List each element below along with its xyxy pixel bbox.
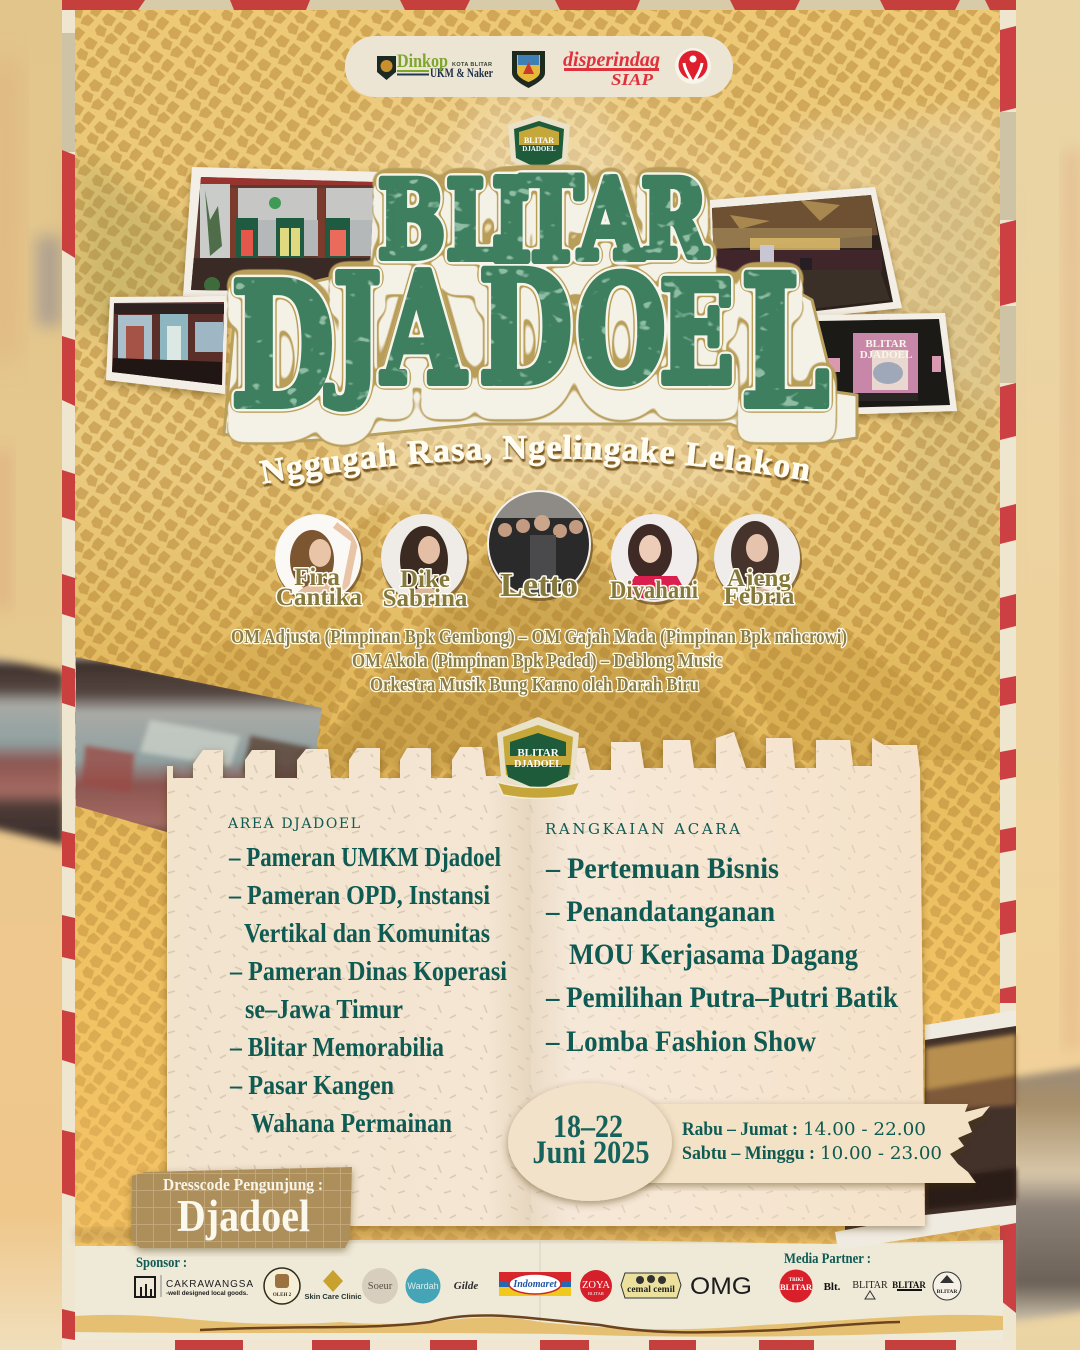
logo: Gilde: Gilde: [454, 1280, 478, 1292]
items: se–Jawa Timur: [245, 994, 403, 1024]
logo: Cakrawangsa: [135, 1275, 253, 1297]
logo: Cakrawangsa: -well designed local goods.: [166, 1290, 248, 1297]
logo: Soeur: [362, 1268, 398, 1304]
logo pill: [345, 36, 733, 97]
badge: Blitar Djadoel panel: BLITAR: [517, 747, 560, 759]
items: – Pameran OPD, Instansi: [228, 880, 490, 910]
heading: RANGKAIAN ACARA: [545, 820, 740, 838]
photo: blurred film left: [76, 657, 322, 832]
logo: Zoya: ZOYA: [582, 1280, 610, 1291]
title backing: white block behind letters: [224, 248, 857, 443]
performer: Ajeng Febria: [714, 514, 802, 610]
supporting acts: Orkestra Musik Bung Karno oleh Darah Biru: [370, 675, 699, 696]
logo: Tribun Blitar: [780, 1270, 813, 1302]
name: Febria: [724, 583, 795, 610]
logo: Dinkop: Dinkop: [397, 51, 448, 72]
date and time ribbon: 14.00 - 22.00: [803, 1119, 926, 1140]
media partners: [780, 1251, 961, 1302]
logo: Blt: Blt.: [824, 1281, 841, 1293]
title line: DJADOEL: D: [479, 238, 572, 419]
title line: BLITAR: T: [519, 153, 583, 287]
logo: Cakrawangsa: CAKRAWANGSA: [166, 1279, 253, 1290]
list: Area Djadoel: [227, 816, 507, 1138]
label: Media Partner :: [784, 1251, 871, 1267]
logo: Skin Care Clinic: [304, 1270, 362, 1301]
supporting acts: OM Adjusta (Pimpinan Bpk Gembong) – OM Gajah Mada (Pimpinan Bpk nahcrowi): [231, 627, 847, 648]
items: Wahana Permainan: [251, 1108, 452, 1138]
logo: Indomaret: [499, 1272, 571, 1296]
heading: AREA DJADOEL: [227, 816, 360, 832]
items: MOU Kerjasama Dagang: [569, 938, 858, 971]
logo: Kota Blitar crest: [512, 51, 545, 88]
badge: Blitar Djadoel top: BLITAR: [524, 136, 554, 145]
name: Sabrina: [383, 585, 468, 612]
ribbon: [590, 1104, 990, 1183]
logo: circle emblem: BLITAR: [937, 1289, 958, 1295]
logo: Indomaret: Indomaret: [512, 1279, 558, 1290]
dresscode tag: [131, 1167, 352, 1248]
performer: Letto: [485, 490, 595, 604]
photo: night market: [705, 187, 902, 318]
logo: Dinkop: [377, 51, 493, 80]
dresscode tag: Dresscode Pengunjung :: [163, 1175, 323, 1194]
items: – Pameran UMKM Djadoel: [228, 842, 501, 872]
logo: Cemal Cemil: cemal cemil: [627, 1285, 675, 1295]
logo: Skin Care Clinic: Skin Care Clinic: [304, 1292, 362, 1301]
title line: BLITAR: [378, 153, 708, 287]
name: Dike: [400, 566, 450, 593]
weekend hours: Sabtu – Minggu :: [682, 1143, 815, 1164]
title line: BLITAR: L: [446, 156, 503, 284]
logo: OMG: OMG: [690, 1273, 752, 1300]
performer: Fira Cantika: [275, 514, 363, 611]
items: – Pemilihan Putra–Putri Batik: [545, 981, 898, 1014]
photo: blurred right: [835, 1010, 1016, 1250]
name: Letto: [500, 567, 578, 604]
items: [228, 842, 507, 1138]
logo: Dinkop: KOTA BLITAR: [452, 62, 492, 68]
items: [545, 852, 898, 1058]
date and time ribbon: Juni 2025: [532, 1135, 650, 1171]
dresscode tag: Djadoel: [177, 1190, 310, 1241]
photo: heritage house: [183, 167, 384, 300]
title line: DJADOEL: D: [231, 245, 334, 446]
title line: BLITAR: R: [641, 158, 708, 282]
title line: DJADOEL: J: [325, 244, 381, 413]
items: – Lomba Fashion Show: [545, 1025, 816, 1058]
name: Divahani: [610, 577, 698, 604]
logo: circle emblem: [933, 1272, 961, 1300]
left page: [167, 747, 531, 1226]
items: – Pameran Dinas Koperasi: [229, 956, 507, 986]
photo: gate: [106, 296, 228, 394]
tagline: Nggugah Rasa, Ngelingake Lelakon: [258, 434, 810, 490]
logo: Cemal Cemil: [621, 1273, 681, 1298]
badge: Blitar Djadoel top: [507, 115, 571, 179]
date text: 18–22: [553, 1109, 623, 1145]
badge: Blitar Djadoel panel: DJADOEL: [514, 759, 562, 770]
title line: BLITAR: B: [378, 159, 445, 283]
logo: Blitar line: [852, 1280, 888, 1299]
blurred side background left: [0, 0, 64, 1350]
title line: DJADOEL: A: [381, 239, 467, 418]
date and time ribbon: 10.00 - 23.00: [820, 1143, 942, 1164]
logo: Zoya: BLITAR: [588, 1291, 604, 1296]
logo: Zoya: [580, 1270, 612, 1302]
logo: Dinkop: UKM & Naker: [430, 66, 493, 80]
title line: BLITAR: A: [578, 155, 644, 284]
items: – Pasar Kangen: [229, 1070, 394, 1100]
title line: DJADOEL: O: [577, 244, 666, 416]
photo: concert stage: BLITAR: [865, 338, 908, 350]
logo: Wardah: Wardah: [407, 1281, 439, 1291]
performer: Dike Sabrina: [381, 514, 469, 612]
photo: concert stage: [810, 313, 957, 414]
title line: BLITAR: I: [492, 156, 531, 287]
badge: Blitar Djadoel top: DJADOEL: [522, 145, 556, 153]
photo: concert stage: DJADOEL: [860, 349, 912, 361]
logo: Wardah: [406, 1268, 440, 1304]
blurred side background right: [1010, 0, 1080, 1350]
title: [231, 153, 829, 448]
name: Fira: [294, 564, 340, 591]
date ellipse: [508, 1083, 672, 1201]
list: Rangkaian Acara: [545, 820, 898, 1058]
sponsors: [135, 1255, 752, 1304]
name: Cantika: [276, 584, 363, 611]
items: – Penandatanganan: [545, 895, 775, 928]
logo: red emblem: [675, 48, 711, 84]
label: Sponsor :: [136, 1255, 187, 1271]
items: – Pertemuan Bisnis: [545, 852, 779, 885]
logo: Disperindag: [563, 47, 660, 89]
logo: Disperindag: SIAP: [611, 70, 654, 89]
right page: [531, 732, 925, 1226]
title line: DJADOEL: L: [741, 236, 829, 448]
logo: Blitar black: BLITAR: [892, 1280, 926, 1290]
bottom sponsor strip: [75, 1228, 1003, 1340]
logo: Soeur: Soeur: [368, 1281, 393, 1292]
supporting acts: [231, 627, 847, 696]
logo: Tribun Blitar: TBIKI: [789, 1278, 803, 1283]
name: Ajeng: [727, 565, 791, 592]
performer: Divahani: [610, 514, 699, 605]
logo: Oleh-oleh circle: OLEH 2: [273, 1293, 292, 1298]
items: – Blitar Memorabilia: [229, 1032, 444, 1062]
logo: Disperindag: disperindag: [563, 47, 660, 71]
logo: Blitar line: BLITAR: [852, 1280, 888, 1291]
note paper: [167, 732, 925, 1226]
weekday hours: Rabu – Jumat :: [682, 1119, 798, 1140]
badge: Blitar Djadoel panel: [497, 717, 580, 798]
items: Vertikal dan Komunitas: [244, 918, 490, 948]
title line: DJADOEL: [231, 236, 829, 448]
supporting acts: OM Akola (Pimpinan Bpk Peded) – Deblong Music: [352, 651, 722, 672]
logo: Tribun Blitar: BLITAR: [780, 1282, 813, 1292]
logo: Oleh-oleh circle: [264, 1268, 300, 1304]
title line: DJADOEL: E: [659, 252, 734, 416]
date and time ribbon: [508, 1083, 990, 1201]
